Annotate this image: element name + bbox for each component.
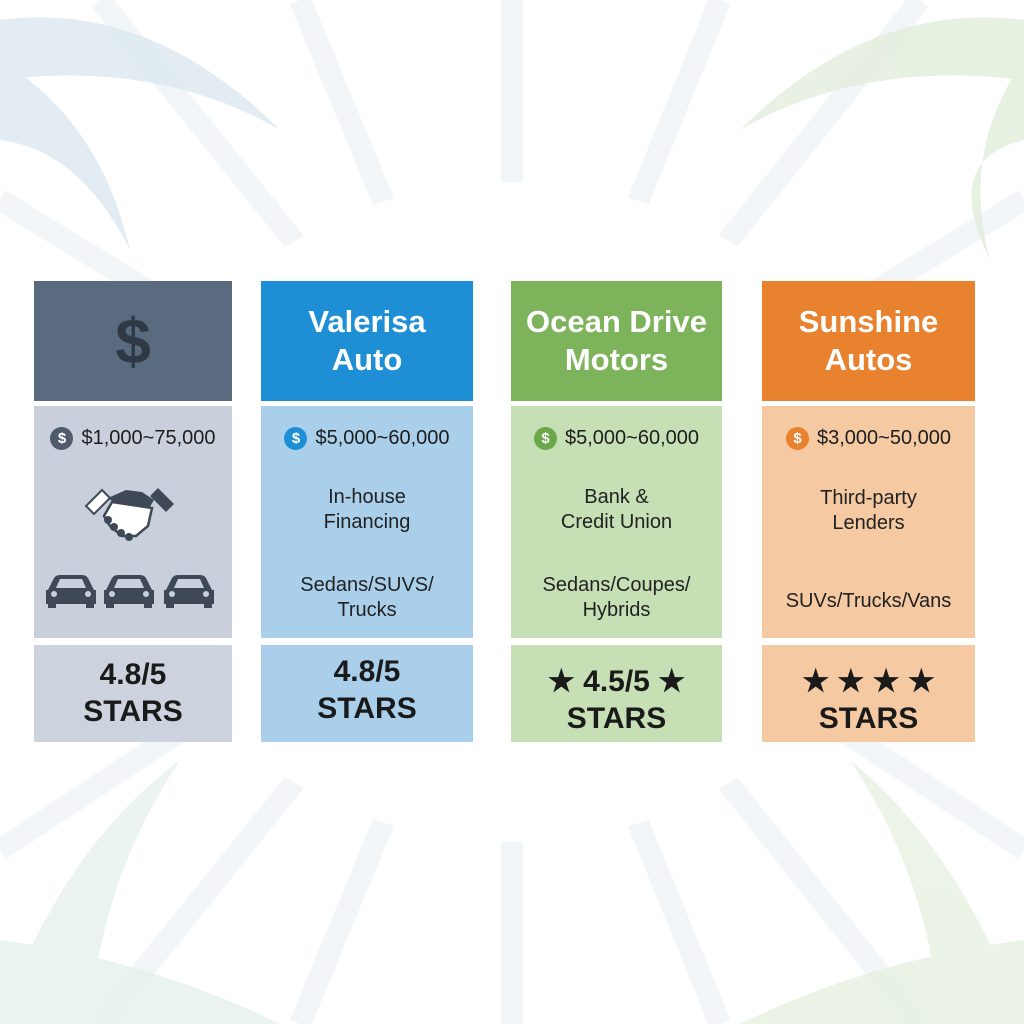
column 2 body: $ bbox=[292, 430, 300, 447]
column 1 body: $1,000~75,000 bbox=[81, 427, 216, 449]
column 2 header: Auto bbox=[332, 342, 402, 377]
column 4 body bbox=[762, 406, 975, 638]
column 3 header: Motors bbox=[565, 342, 668, 377]
column 3 header bbox=[511, 281, 722, 401]
column 3 body bbox=[511, 406, 722, 638]
column 4 body: Lenders bbox=[832, 512, 905, 534]
column 2 header bbox=[261, 281, 473, 401]
column 3 rating: STARS bbox=[567, 702, 666, 735]
icon: cars bbox=[46, 575, 214, 608]
column 1 rating: 4.8/5 bbox=[100, 658, 166, 691]
column 2 body: In-house bbox=[328, 486, 406, 508]
column 2 body: Sedans/SUVS/ bbox=[300, 574, 434, 596]
column 4 body: SUVs/Trucks/Vans bbox=[786, 590, 951, 612]
column 3 rating bbox=[511, 645, 722, 742]
column 3 rating: ★ 4.5/5 ★ bbox=[548, 665, 685, 698]
column 4 header bbox=[762, 281, 975, 401]
column 4 rating: STARS bbox=[819, 702, 918, 735]
column 4 body: $ bbox=[793, 430, 802, 447]
column 2 body: $5,000~60,000 bbox=[315, 427, 450, 449]
column 2 header: Valerisa bbox=[308, 304, 426, 339]
column 4 header: Autos bbox=[825, 342, 912, 377]
column 3 body: Sedans/Coupes/ bbox=[543, 574, 690, 596]
column 3 body: Hybrids bbox=[583, 599, 650, 621]
icon: handshake bbox=[84, 488, 174, 541]
column 3 body: Bank & bbox=[584, 486, 649, 508]
column 4 body: $3,000~50,000 bbox=[817, 427, 951, 449]
column 4 rating bbox=[762, 645, 975, 742]
column 3 header: Ocean Drive bbox=[526, 304, 707, 339]
column 4 body: Third-party bbox=[820, 487, 917, 509]
column 2 body bbox=[261, 406, 473, 638]
column 2 rating: STARS bbox=[317, 692, 417, 725]
column 1 body: $ bbox=[58, 430, 66, 447]
column 4 rating: ★ ★ ★ ★ bbox=[802, 665, 935, 698]
column 2 body: Financing bbox=[324, 511, 410, 533]
column 1 body bbox=[34, 406, 232, 638]
column 3 body: Credit Union bbox=[561, 511, 672, 533]
column 3 body: $ bbox=[541, 430, 550, 447]
column 1 header: $ bbox=[115, 305, 151, 377]
column 1 header bbox=[34, 281, 232, 401]
column 1 rating bbox=[34, 645, 232, 742]
column 1 rating: STARS bbox=[83, 695, 183, 728]
column 3 body: $5,000~60,000 bbox=[565, 427, 699, 449]
column 2 rating bbox=[261, 645, 473, 742]
column 2 rating: 4.8/5 bbox=[334, 655, 400, 688]
column 2 body: Trucks bbox=[337, 599, 397, 621]
column 4 header: Sunshine bbox=[799, 304, 938, 339]
